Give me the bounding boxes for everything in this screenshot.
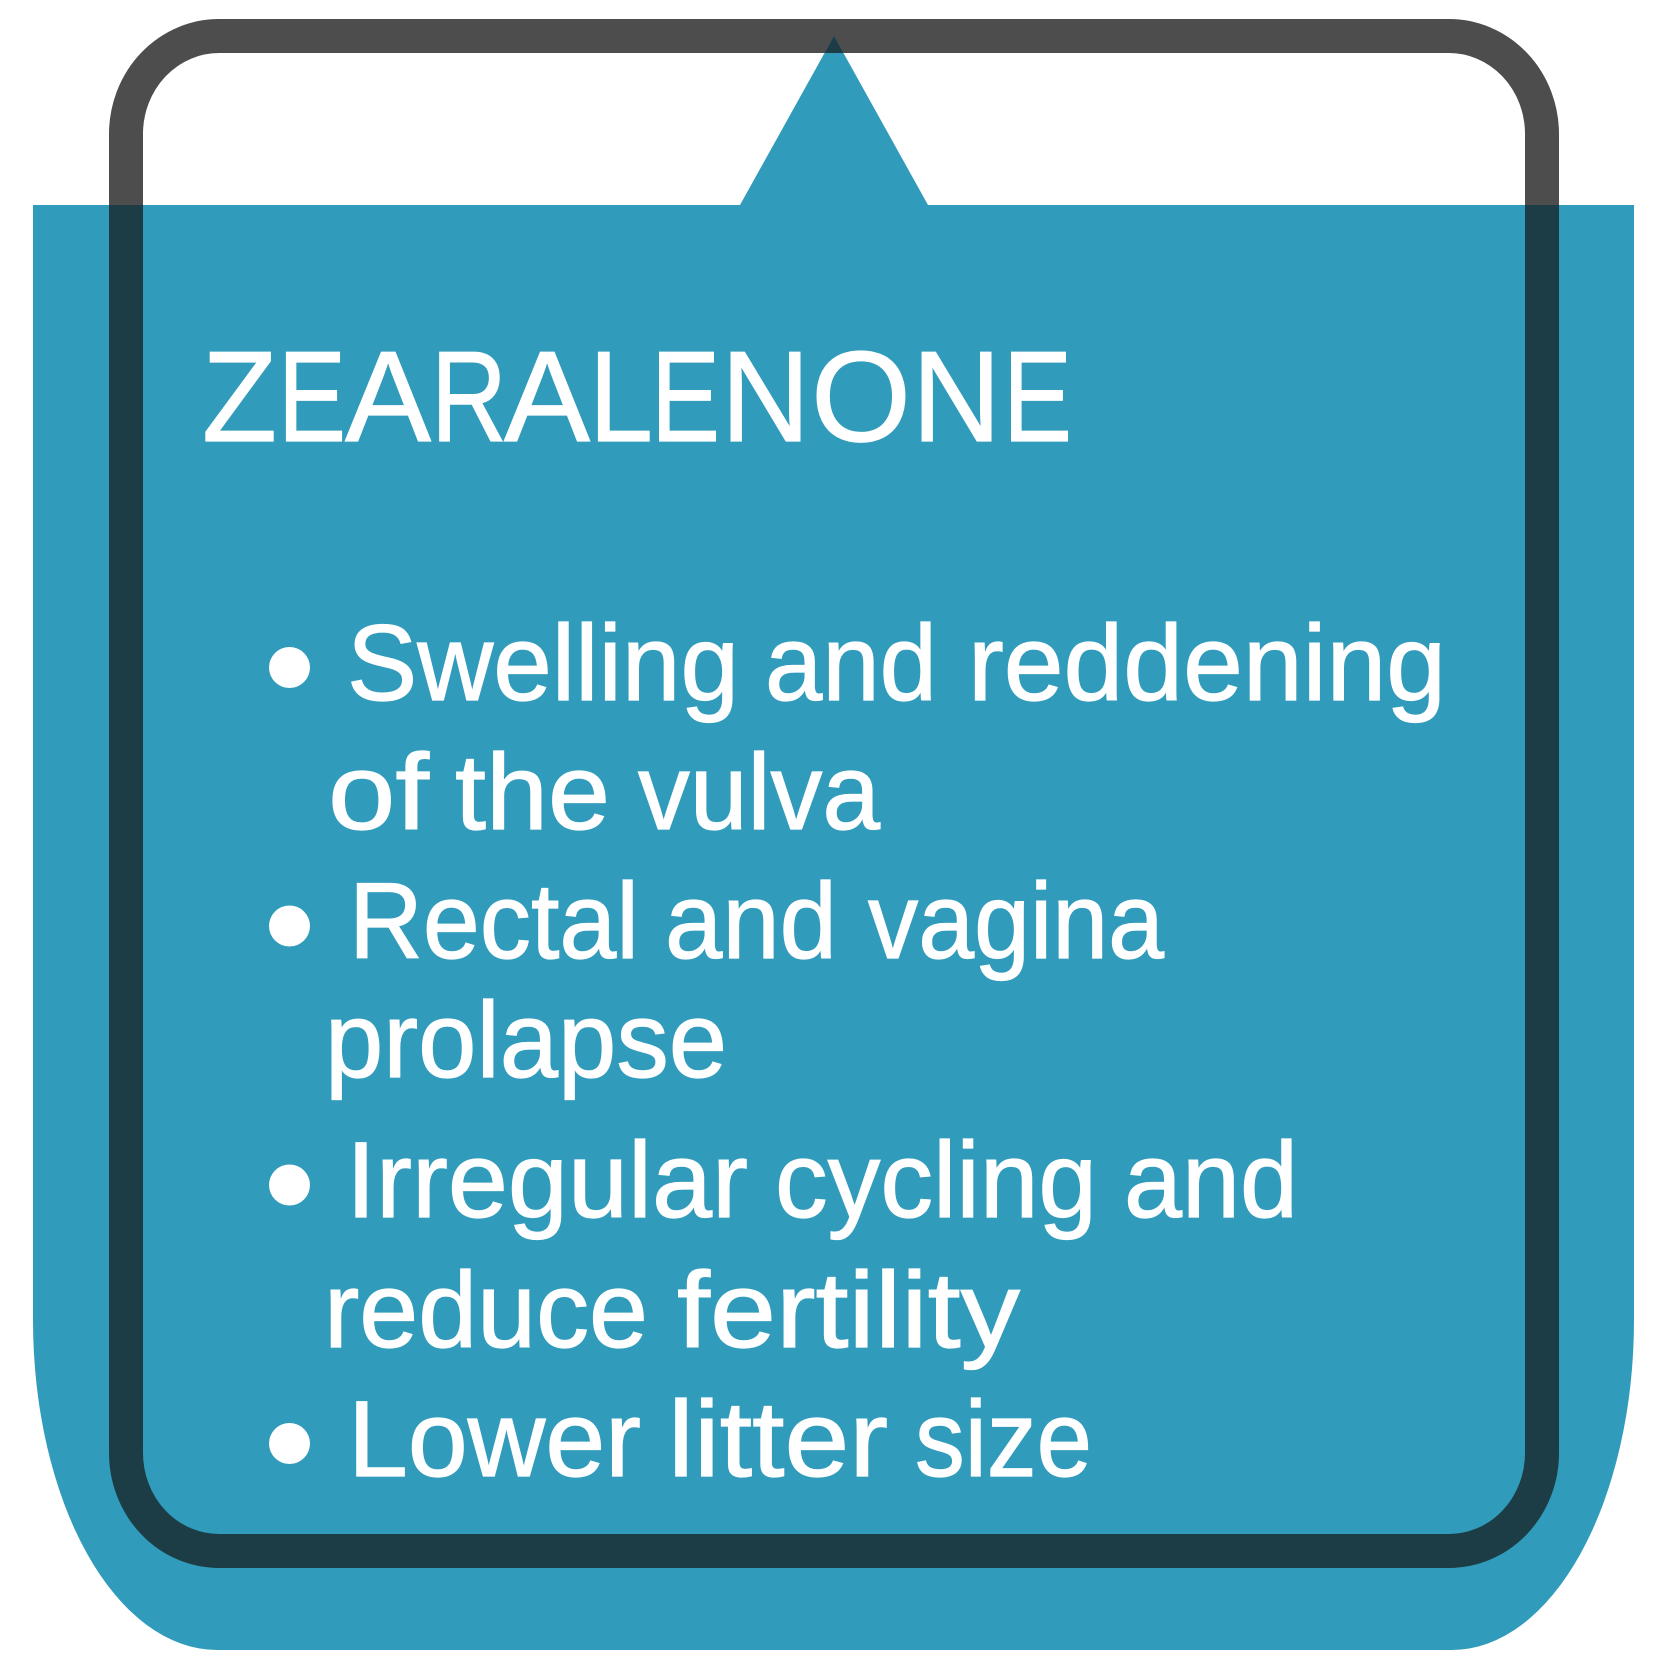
title: E: [278, 325, 346, 469]
bullet item: irregular cycling: Irregular: [346, 1119, 748, 1240]
bullet item: irregular cycling: cycling: [775, 1119, 1097, 1240]
title: L: [589, 325, 653, 469]
bullet item: irregular cycling: [269, 1119, 1298, 1370]
title: Z: [202, 325, 277, 469]
bullet item: prolapse: [269, 860, 1165, 1100]
bullet item: swelling: the: [455, 731, 610, 852]
bullet item: swelling: and: [765, 602, 937, 723]
bullet item: litter size: size: [915, 1378, 1092, 1499]
bullet item: irregular cycling: fertility: [677, 1249, 1020, 1370]
title: E: [651, 325, 720, 469]
bullet item: prolapse: Rectal: [349, 860, 639, 981]
bullet item: swelling: [269, 602, 1446, 852]
title: E: [1003, 325, 1072, 469]
title: N: [721, 325, 810, 469]
title: A: [345, 325, 431, 469]
rounded frame outline: [126, 36, 1542, 1551]
frame outline overlapping the panel: [126, 36, 1542, 1551]
bullet item: litter size: [269, 1378, 1092, 1499]
title: R: [431, 325, 507, 469]
bullet item: irregular cycling: and: [1124, 1119, 1298, 1240]
bullet item: prolapse: prolapse: [325, 979, 727, 1100]
bullet item: swelling: of: [328, 731, 430, 852]
bullet item: swelling: reddening: [968, 602, 1446, 723]
bullet item: swelling: Swelling: [347, 602, 739, 723]
bullet item: litter size: litter: [668, 1378, 888, 1499]
title: N: [912, 325, 1001, 469]
title: O: [811, 325, 911, 469]
bullet item: irregular cycling: reduce: [324, 1249, 648, 1370]
bullet item: litter size: Lower: [348, 1378, 641, 1499]
bullet item: prolapse: and: [665, 860, 837, 981]
symptom list: [269, 602, 1446, 1499]
title: A: [504, 325, 590, 469]
bullet item: swelling: vulva: [638, 731, 881, 852]
bullet item: prolapse: vagina: [868, 860, 1165, 981]
